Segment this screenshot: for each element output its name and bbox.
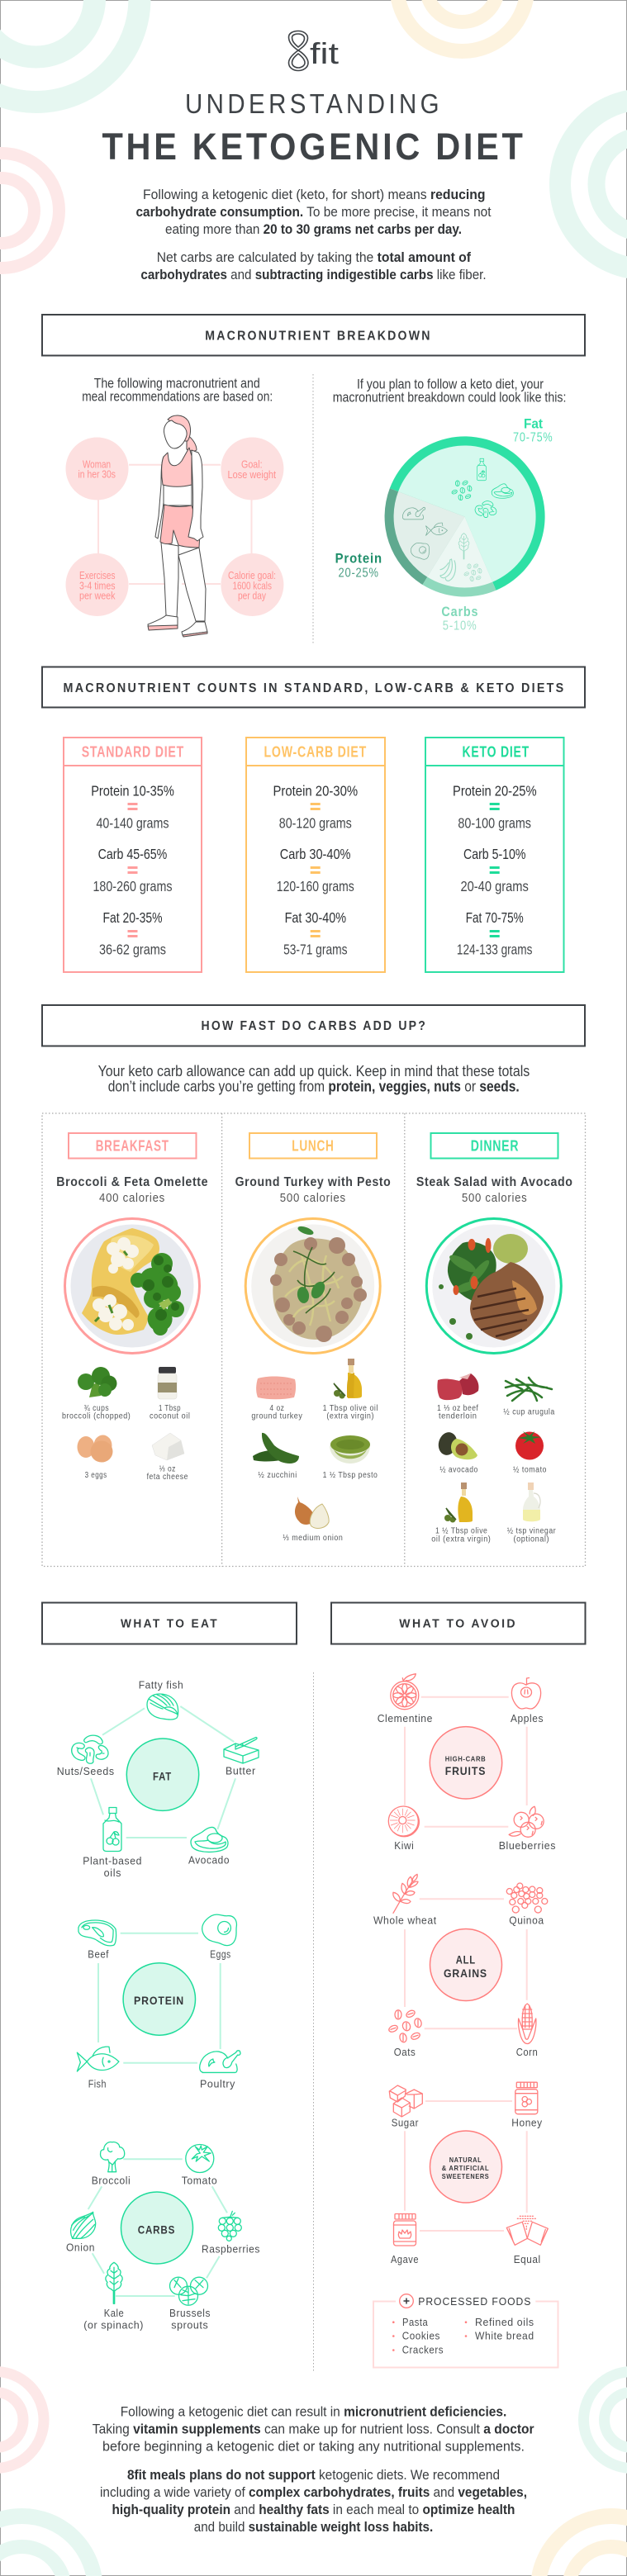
circle: goal: Lose weight (228, 469, 277, 481)
intro paragraph 2: carbohydrates and subtracting indigestible carbs like fiber. (140, 267, 487, 282)
fruits centre circle (430, 1727, 502, 1799)
icon: brussels sprouts (170, 2277, 208, 2305)
dinner meal title (416, 1175, 573, 1205)
closing paragraph 2: 8fit meals plans do not support ketogenic diets. We recommend (127, 2467, 500, 2483)
breakfast meal title (56, 1175, 208, 1205)
label: plant-based oils: oils (104, 1867, 121, 1879)
circle: woman in her 30s (66, 438, 129, 500)
label: carbs (441, 604, 478, 633)
label: feta: ⅓ oz (159, 1465, 176, 1474)
icon: agave (393, 2213, 416, 2246)
card: low-carb diet: Protein 20-30% (273, 782, 358, 799)
heading: how fast do carbs add up: HOW FAST DO CARBS ADD UP? (202, 1019, 427, 1033)
label: onion: ⅓ medium onion (283, 1534, 343, 1543)
icon: fatty fish (147, 1694, 178, 1720)
label: brussels sprouts: sprouts (171, 2319, 208, 2331)
label: brussels sprouts (169, 2308, 211, 2331)
closing paragraph 1: before beginning a ketogenic diet or taking any nutritional supplements. (102, 2438, 525, 2454)
figure: woman (148, 415, 207, 637)
title: UNDERSTANDING (185, 89, 443, 120)
circle: calorie goal: Calorie goal: (228, 570, 276, 581)
ingredient: coconut oil (158, 1367, 177, 1399)
icon: eggs (202, 1914, 236, 1946)
panel: profile (66, 375, 283, 637)
label: broccoli: ¾ cups (84, 1404, 109, 1413)
closing paragraph 1: Taking vitamin supplements can make up for nutrient loss. Consult a doctor (93, 2421, 534, 2436)
label: pesto: 1 ½ Tbsp pesto (323, 1471, 378, 1480)
label: sugar: Sugar (392, 2117, 419, 2128)
decoration: left pink rings (0, 154, 59, 268)
label: poultry: Poultry (200, 2079, 235, 2090)
label: whole wheat: Whole wheat (373, 1914, 437, 1926)
card: keto diet: 20-40 grams (461, 878, 529, 894)
dinner meal title: 500 calories (462, 1192, 527, 1205)
closing paragraph 2 (100, 2467, 527, 2535)
label: carbs: Carbs (441, 604, 478, 619)
label: tomato: ½ tomato (513, 1465, 547, 1474)
label: vinegar (507, 1527, 556, 1544)
breakfast meal title: 400 calories (99, 1192, 165, 1205)
icon: sugar (389, 2085, 422, 2117)
lunch plate (245, 1219, 380, 1353)
icon: clementine (391, 1674, 419, 1710)
carbs intro text: Your keto carb allowance can add up quick. Keep in mind that these totals (98, 1063, 530, 1079)
label: ground turkey (251, 1404, 302, 1421)
dinner heading (431, 1133, 558, 1158)
card: standard diet (64, 738, 202, 972)
decoration: bottom-right yellow arcs (539, 2516, 627, 2576)
heading: macronutrient breakdown (42, 315, 585, 355)
label: eggs: Eggs (210, 1948, 231, 1960)
label: broccoli: Broccoli (92, 2175, 131, 2186)
icon: oats (388, 2009, 422, 2043)
icon: nuts (72, 1735, 108, 1763)
processed foods list: Cookies (402, 2331, 440, 2342)
heading: what to avoid (331, 1602, 585, 1644)
icon: honey (515, 2082, 538, 2114)
breakfast heading: BREAKFAST (96, 1137, 169, 1154)
circle: goal: Goal: (241, 459, 263, 471)
pie icons (402, 458, 513, 581)
ingredient: feta (152, 1433, 184, 1460)
card: low-carb diet: LOW-CARB DIET (264, 744, 367, 761)
lunch heading (249, 1133, 377, 1158)
diagram: all grains (373, 1874, 548, 2058)
profile intro text: The following macronutrient and (94, 375, 260, 391)
icon: butter (224, 1738, 259, 1763)
card: low-carb diet (246, 738, 385, 972)
decoration: right mint rings (560, 99, 627, 269)
label: broccoli (62, 1404, 131, 1421)
label: nuts: Nuts/Seeds (57, 1766, 115, 1777)
label: olive oil: (extra virgin) (326, 1411, 374, 1421)
label: olive oil (323, 1404, 378, 1421)
grains centre circle: GRAINS (444, 1966, 487, 1980)
processed foods list: Refined oils (475, 2317, 534, 2328)
circle: woman in her 30s: Woman (83, 459, 111, 471)
closing paragraph 1 (93, 2403, 534, 2454)
heading: what to avoid: WHAT TO AVOID (399, 1617, 517, 1630)
icon: avocado (191, 1827, 228, 1852)
label: olive oil: 1 Tbsp olive oil (323, 1404, 378, 1413)
label: olive oil 2: oil (extra virgin) (431, 1535, 491, 1544)
intro paragraph 1: Following a ketogenic diet (keto, for short) means reducing (143, 187, 486, 202)
card: keto diet: 80-100 grams (458, 814, 531, 831)
icon: tomato (186, 2144, 214, 2172)
fat centre circle (126, 1739, 199, 1810)
panel: lunch (235, 1133, 391, 1543)
card: low-carb diet: 53-71 grams (283, 942, 348, 958)
pie chart (385, 436, 545, 596)
logo: 8fit (289, 31, 339, 71)
heading: macronutrient counts (42, 667, 585, 707)
icon: corn (519, 2004, 536, 2043)
circle: calorie goal: per day (238, 591, 267, 602)
label: corn: Corn (516, 2047, 538, 2058)
dinner heading: DINNER (471, 1137, 519, 1154)
intro paragraph 1: eating more than 20 to 30 grams net carbs per day. (165, 221, 462, 237)
label: carbs: 5-10% (443, 619, 477, 633)
icon: plus (400, 2294, 413, 2308)
panel: dinner (416, 1133, 573, 1544)
label: zucchini: ½ zucchini (258, 1471, 297, 1480)
card: standard diet: 40-140 grams (96, 814, 169, 831)
processed foods title: PROCESSED FOODS (418, 2295, 531, 2308)
label: brussels sprouts: Brussels (169, 2308, 211, 2319)
label: raspberries: Raspberries (202, 2244, 260, 2256)
card: low-carb diet: Fat 30-40% (285, 909, 346, 926)
label: protein (335, 551, 382, 580)
carbs centre circle (121, 2192, 193, 2264)
label: feta (147, 1465, 188, 1482)
label: tomato: Tomato (182, 2175, 217, 2186)
ingredient: ground turkey (256, 1376, 296, 1399)
diagram: protein (77, 1914, 240, 2090)
pie intro text (333, 377, 566, 406)
card: keto diet: Carb 5-10% (463, 846, 525, 862)
ingredient: olive oil 2 (444, 1483, 473, 1523)
ingredient: broccoli (78, 1367, 117, 1397)
label: beef (437, 1404, 478, 1421)
label: vinegar: ½ tsp vinegar (507, 1527, 556, 1536)
label: fat (513, 415, 553, 445)
lunch meal title (235, 1175, 391, 1205)
label: fish: Fish (88, 2079, 107, 2090)
connector lines (98, 465, 251, 584)
card: standard diet: 36-62 grams (99, 942, 166, 958)
heading: what to eat: WHAT TO EAT (121, 1617, 219, 1630)
carbs centre circle: CARBS (138, 2223, 175, 2236)
card: low-carb diet: 120-160 grams (277, 878, 354, 894)
icon: blueberries (509, 1806, 544, 1837)
label: olive oil 2 (431, 1527, 491, 1544)
circle: calorie goal (221, 553, 283, 616)
label: feta: feta cheese (147, 1473, 188, 1482)
sweeteners centre circle: SWEETENERS (442, 2172, 489, 2180)
label: coconut oil: coconut oil (150, 1411, 190, 1421)
ingredient: olive oil (334, 1359, 362, 1399)
circle: exercises: 3-4 times (79, 580, 116, 591)
lunch meal title: Ground Turkey with Pesto (235, 1175, 391, 1189)
label: blueberries: Blueberries (499, 1840, 556, 1852)
sweeteners centre circle: & ARTIFICIAL (442, 2164, 489, 2172)
label: eggs: 3 eggs (85, 1471, 107, 1480)
card: low-carb diet: Carb 30-40% (280, 846, 350, 862)
label: kale: Kale (104, 2308, 124, 2319)
label: kale: (or spinach) (83, 2319, 144, 2331)
profile intro text: meal recommendations are based on: (82, 388, 273, 404)
grains centre circle: ALL (456, 1953, 476, 1966)
ingredient: arugula (506, 1378, 552, 1401)
fat centre circle: FAT (153, 1770, 172, 1783)
closing paragraph 2: including a wide variety of complex carbohydrates, fruits and vegetables, (100, 2484, 527, 2500)
label: kiwi: Kiwi (394, 1840, 414, 1852)
label: vinegar: (optional) (514, 1535, 549, 1544)
heading: macronutrient counts: MACRONUTRIENT COUNTS IN STANDARD, LOW-CARB & KETO DIETS (63, 681, 565, 695)
ingredient: vinegar (523, 1483, 540, 1521)
divider between eat and avoid (312, 1672, 314, 2372)
closing paragraph 2: and build sustainable weight loss habits. (194, 2519, 433, 2535)
label: quinoa: Quinoa (509, 1914, 544, 1926)
card: low-carb diet: 80-120 grams (279, 814, 352, 831)
icon: onion (71, 2212, 96, 2238)
label: beef: 1 ⅓ oz beef (437, 1404, 478, 1413)
label: plant-based oils: Plant-based (83, 1855, 142, 1867)
breakfast plate (64, 1219, 200, 1353)
card: keto diet: 124-133 grams (457, 942, 533, 958)
card: standard diet: STANDARD DIET (82, 744, 184, 761)
dinner meal title: Steak Salad with Avocado (416, 1175, 573, 1189)
diagram: carbs (66, 2142, 260, 2331)
label: oats: Oats (394, 2047, 416, 2058)
circle: goal (221, 438, 283, 500)
diagram: high-carb fruits (378, 1674, 556, 1852)
label: kale (83, 2308, 144, 2331)
intro paragraph 2 (140, 249, 487, 282)
card: standard diet: Fat 20-35% (102, 909, 162, 926)
sweeteners centre circle (430, 2131, 502, 2203)
ingredient: pesto (330, 1435, 370, 1464)
label: equal: Equal (514, 2254, 541, 2265)
card: standard diet: 180-260 grams (93, 878, 173, 894)
label: fat: Fat (524, 415, 543, 431)
label: agave: Agave (391, 2254, 419, 2265)
card: keto diet (425, 738, 563, 972)
intro paragraph 1: carbohydrate consumption. To be more precise, it means not (135, 204, 492, 220)
intro paragraph 2: Net carbs are calculated by taking the total amount of (157, 249, 471, 265)
carbs intro text: don’t include carbs you’re getting from protein, veggies, nuts or seeds. (108, 1079, 520, 1095)
circle: exercises: Exercises (79, 570, 116, 581)
fruits centre circle: FRUITS (445, 1764, 486, 1777)
closing paragraph 2: high-quality protein and healthy fats in each meal to optimize health (112, 2502, 515, 2517)
decoration: top-right yellow rings (397, 0, 527, 51)
panel: macro pie (333, 377, 566, 633)
label: plant-based oils (83, 1855, 142, 1879)
icon: kale (106, 2262, 122, 2303)
processed foods list: White bread (475, 2331, 534, 2342)
carbs intro text (98, 1063, 530, 1095)
icon: plant-based oils (103, 1807, 121, 1852)
closing paragraph 1: Following a ketogenic diet can result in micronutrient deficiencies. (121, 2403, 506, 2419)
label: clementine: Clementine (378, 1713, 433, 1724)
processed foods list: Crackers (402, 2345, 444, 2356)
label: avocado: ½ avocado (439, 1465, 478, 1474)
icon: equal (506, 2216, 548, 2245)
icon: whole wheat (393, 1874, 418, 1913)
ingredient: eggs (78, 1435, 112, 1462)
icon: apple (511, 1678, 541, 1709)
lunch heading: LUNCH (292, 1137, 335, 1154)
decoration: lower-right mint rings (583, 2372, 627, 2468)
intro paragraph 1 (135, 187, 492, 237)
pie intro text: If you plan to follow a keto diet, your (357, 377, 544, 392)
lunch meal title: 500 calories (280, 1192, 346, 1205)
label: coconut oil: 1 Tbsp (159, 1404, 181, 1413)
fruits centre circle: HIGH-CARB (445, 1755, 486, 1763)
label: protein: Protein (335, 551, 382, 567)
label: protein: 20-25% (339, 566, 379, 580)
processed foods list: Pasta (402, 2317, 428, 2328)
ingredient: avocado (436, 1430, 477, 1459)
icon: quinoa (506, 1883, 548, 1913)
ingredient: zucchini (253, 1433, 299, 1464)
label: fat: 70-75% (513, 431, 553, 445)
protein centre circle (123, 1963, 195, 2035)
grains centre circle (430, 1929, 502, 2000)
title (102, 89, 525, 168)
heading: how fast do carbs add up (42, 1005, 585, 1046)
title: THE KETOGENIC DIET (102, 126, 525, 168)
circle: woman in her 30s: in her 30s (78, 469, 116, 481)
breakfast meal title: Broccoli & Feta Omelette (56, 1175, 208, 1189)
logo: 8fit: fit (310, 36, 339, 70)
decoration: top-left mint rings (0, 0, 140, 102)
label: butter: Butter (226, 1765, 256, 1777)
profile intro text (82, 375, 273, 404)
ingredient: tomato (515, 1431, 544, 1460)
decoration: lower-left pink rings (0, 2372, 44, 2468)
circle: exercises (66, 553, 129, 616)
card: keto diet: KETO DIET (463, 744, 530, 761)
label: onion: Onion (66, 2242, 95, 2254)
icon: kiwi (388, 1806, 419, 1837)
icon: beef (78, 1920, 116, 1946)
label: fatty fish: Fatty fish (139, 1679, 183, 1691)
diagram: sweeteners (389, 2082, 548, 2265)
label: ground turkey: ground turkey (251, 1411, 302, 1421)
heading: macronutrient breakdown: MACRONUTRIENT BREAKDOWN (205, 329, 432, 344)
icon: broccoli (101, 2142, 125, 2172)
label: arugula: ½ cup arugula (503, 1408, 555, 1417)
divider between macro panels (312, 374, 314, 644)
circle: calorie goal: 1600 kcals (233, 580, 272, 591)
breakfast heading (69, 1133, 197, 1158)
card: standard diet: Carb 45-65% (98, 846, 167, 862)
heading: what to eat (42, 1602, 297, 1644)
ingredient: onion (295, 1497, 329, 1528)
panel: breakfast (56, 1133, 208, 1482)
diagram: fat (57, 1679, 259, 1879)
circle: exercises: per week (79, 591, 116, 602)
card: keto diet: Fat 70-75% (466, 909, 524, 926)
label: broccoli: broccoli (chopped) (62, 1411, 131, 1421)
label: beef: tenderloin (439, 1411, 477, 1421)
label: ground turkey: 4 oz (269, 1404, 284, 1413)
label: olive oil 2: 1 ½ Tbsp olive (435, 1527, 487, 1536)
label: coconut oil (150, 1404, 190, 1421)
icon: raspberries (218, 2211, 241, 2241)
label: beef: Beef (88, 1948, 109, 1960)
protein centre circle: PROTEIN (134, 1994, 184, 2007)
dinner plate (426, 1219, 561, 1353)
ingredient: beef (437, 1373, 479, 1400)
decoration: bottom-left mint arcs (0, 2516, 95, 2576)
icon: fish (77, 2047, 119, 2071)
icon: poultry (200, 2051, 240, 2072)
pie intro text: macronutrient breakdown could look like this: (333, 390, 566, 406)
label: avocado: Avocado (188, 1854, 230, 1866)
processed foods list (392, 2317, 534, 2356)
card: keto diet: Protein 20-25% (453, 782, 537, 799)
sweeteners centre circle: NATURAL (449, 2156, 482, 2164)
label: apples: Apples (511, 1713, 544, 1724)
meal panel frame (42, 1113, 585, 1566)
label: honey: Honey (511, 2117, 543, 2128)
card: standard diet: Protein 10-35% (91, 782, 174, 799)
panel: processed foods (373, 2294, 558, 2367)
